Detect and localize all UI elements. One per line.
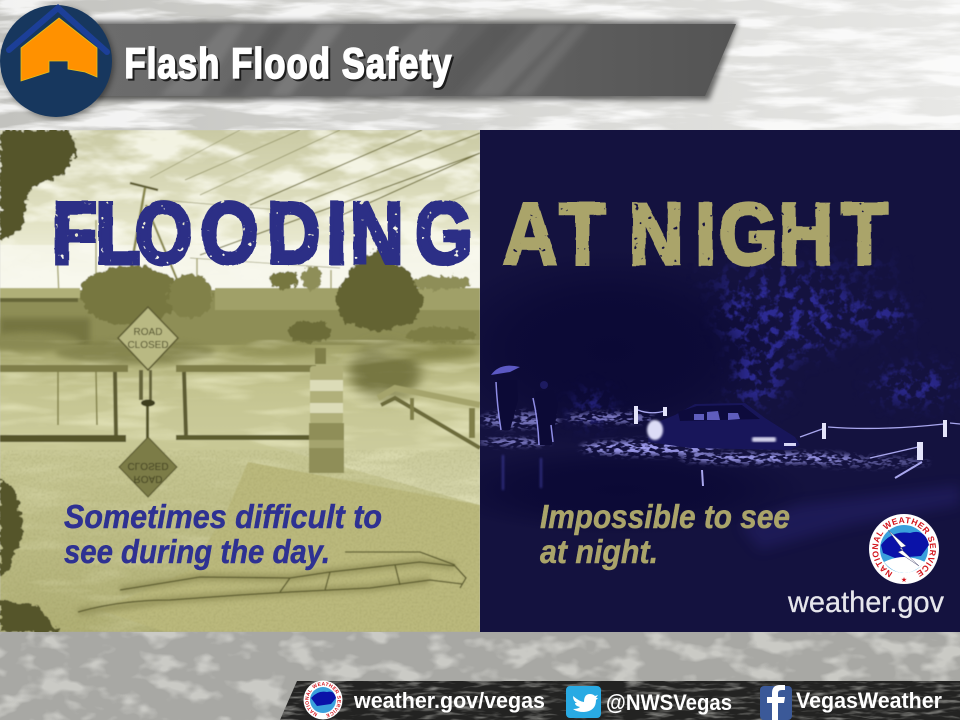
lower water reflecting the sky	[0, 440, 480, 632]
stranded car	[647, 403, 800, 450]
sign reflection: CLOSED	[127, 460, 169, 471]
dark shadows	[512, 296, 724, 514]
text: day caption	[64, 498, 382, 570]
NWS seal: NATIONAL WEATHER SERVICE	[872, 517, 936, 578]
text: day caption: Sometimes difficult to	[64, 498, 382, 535]
icon: twitter	[566, 686, 601, 718]
text: website: weather.gov/vegas	[353, 688, 545, 713]
barricades	[0, 365, 316, 442]
road closed sign and posts: ROAD	[134, 327, 162, 338]
highway bridge	[0, 288, 80, 302]
icon: facebook	[760, 685, 792, 720]
text: night caption: Impossible to see	[540, 498, 790, 535]
tree foliage	[574, 258, 957, 422]
traffic barrel and its reflection	[309, 348, 344, 473]
dark tree silhouettes	[0, 130, 78, 632]
heading: Flash Flood Safety: Flash Flood Safety	[126, 42, 454, 90]
bottom ground	[503, 455, 960, 550]
sky with clouds	[0, 130, 480, 295]
heading: FLOODING: FLOODING	[52, 185, 472, 282]
panel: flooding during the day	[0, 130, 480, 632]
footer contact bar	[280, 680, 960, 720]
guardrail	[378, 388, 480, 448]
road closed sign and posts	[118, 307, 178, 400]
sign reflection	[119, 400, 177, 497]
text: night caption: at night.	[540, 533, 658, 570]
text: weather.gov: weather.gov	[787, 586, 944, 619]
text: night caption	[540, 498, 790, 570]
road closed sign and posts: CLOSED	[127, 340, 169, 351]
NWS seal: ★	[901, 576, 907, 584]
power lines and poles	[56, 130, 480, 289]
pavement and cracks	[78, 462, 480, 632]
icon: house in navy circle	[0, 5, 114, 119]
text: twitter handle: @NWSVegas	[606, 690, 732, 715]
flood water	[0, 332, 480, 515]
icon: small NWS seal: NATIONAL WEATHER SERVICE	[305, 682, 341, 718]
heading: AT NIGHT: AT NIGHT	[503, 186, 888, 283]
panel: flooding at night	[480, 130, 960, 632]
text: day caption: see during the day.	[64, 533, 330, 570]
flood splash highlights	[479, 412, 930, 467]
sign reflection: ROAD	[134, 473, 162, 484]
distant bank, grass and trees	[0, 248, 480, 350]
header banner	[95, 21, 738, 100]
two people at the water's edge	[491, 366, 558, 445]
text: facebook name: VegasWeather	[796, 688, 942, 713]
rope barriers and posts	[636, 406, 960, 486]
heading: Flash Flood Safety: Flash Flood Safety	[124, 40, 452, 88]
